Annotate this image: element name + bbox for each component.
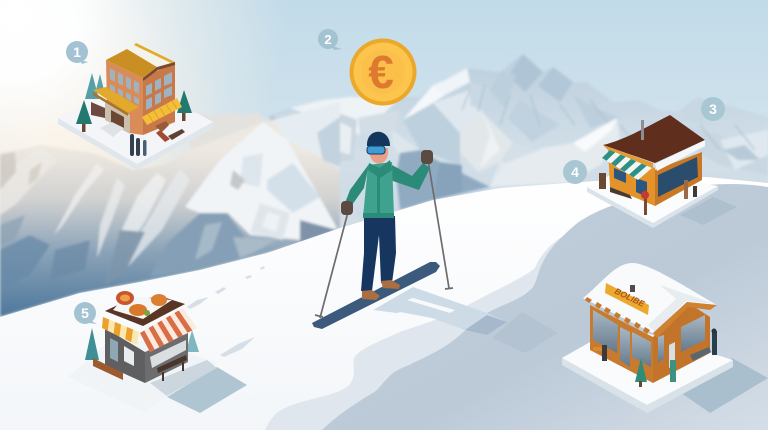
ski — [312, 262, 440, 329]
chimney — [641, 120, 644, 140]
right awning — [140, 308, 197, 352]
benches — [93, 355, 187, 381]
bakery windows — [593, 310, 705, 367]
shop window wall — [658, 157, 698, 197]
hotel entrance wing — [105, 102, 130, 134]
second ridge — [460, 113, 513, 172]
bakery sign: BOLIBE — [613, 286, 647, 309]
badge 3: 3 — [709, 101, 717, 117]
snow slope — [0, 177, 768, 430]
badge 5 — [74, 302, 97, 324]
restaurant roof — [105, 296, 185, 326]
far ridge facets — [403, 54, 768, 175]
restaurant — [68, 291, 247, 413]
mountain range — [0, 54, 768, 317]
far ridge — [270, 54, 768, 255]
left awning — [102, 317, 139, 345]
bakery walls — [590, 305, 653, 383]
bakery sign — [605, 283, 649, 315]
euro coin: € — [368, 46, 394, 98]
shop front windows and door — [610, 168, 647, 199]
trousers — [361, 216, 396, 291]
boots — [362, 290, 380, 300]
light snow band — [265, 238, 640, 430]
near left mountains — [0, 102, 340, 317]
hotel awning — [142, 98, 182, 125]
hotel guests — [130, 134, 146, 156]
trees — [85, 328, 99, 360]
badge 1: 1 — [73, 44, 81, 60]
badge 5: 5 — [81, 305, 89, 321]
shop right — [587, 115, 737, 228]
head — [369, 148, 388, 164]
ski poles — [315, 160, 453, 318]
shop awning — [602, 150, 652, 180]
hazy peaks behind hotel — [190, 112, 280, 180]
main left peak shaded faces — [267, 163, 320, 213]
euro coin — [350, 38, 416, 106]
badge 2 — [318, 29, 342, 50]
hotel platform — [58, 118, 213, 170]
hotel roof — [106, 49, 157, 78]
skier — [312, 132, 453, 329]
shop shadow — [680, 197, 737, 225]
left mountain streaks — [0, 146, 190, 290]
bakery shop — [562, 263, 768, 413]
restaurant walls — [105, 328, 145, 383]
gloves — [341, 201, 353, 215]
centre mountain — [290, 97, 400, 135]
skier shadow — [373, 287, 558, 353]
jacket body — [363, 162, 394, 217]
badge 3 — [701, 97, 725, 121]
hotel trees — [76, 73, 192, 132]
shop platform — [587, 186, 718, 228]
ski tracks — [187, 266, 265, 357]
shop details — [599, 173, 697, 215]
hotel windows — [110, 68, 172, 110]
hotel door steps and bench — [155, 121, 169, 132]
hotel — [58, 43, 213, 170]
bakery platform — [562, 358, 733, 413]
bakery roof — [583, 263, 717, 333]
restaurant shadow — [167, 367, 247, 413]
roof fringe — [585, 297, 650, 334]
shaded valley — [322, 184, 768, 430]
food on roof — [116, 291, 167, 316]
shop walls — [608, 150, 655, 206]
far ridge striations — [462, 85, 755, 150]
main left peak snow — [185, 122, 337, 240]
badge 2: 2 — [324, 32, 332, 47]
badge 4: 4 — [571, 164, 579, 180]
hotel stairs — [100, 122, 124, 137]
bakery shadow — [677, 358, 768, 413]
badge 1 — [66, 41, 88, 64]
restaurant windows — [110, 338, 118, 362]
bakery bench and people — [593, 328, 717, 387]
hotel walls — [106, 60, 143, 135]
goggles — [367, 146, 385, 154]
shop roof — [603, 115, 705, 163]
badge 4 — [563, 160, 587, 184]
jacket arms — [345, 163, 430, 205]
restaurant platform — [68, 340, 217, 412]
